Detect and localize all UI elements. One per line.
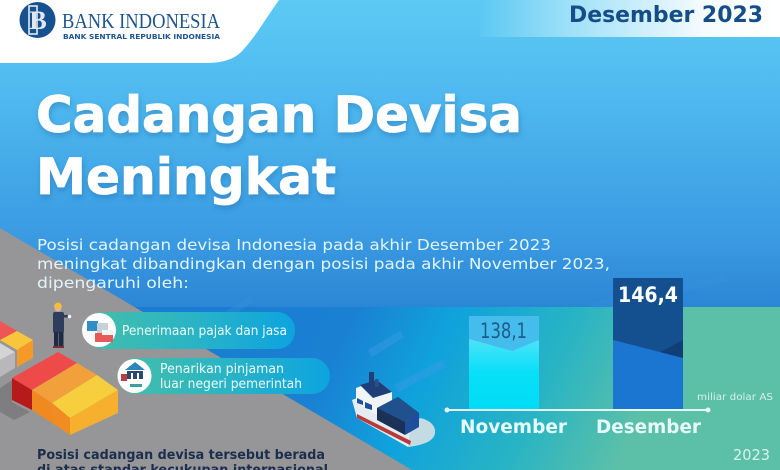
- bar: Desember: 146,4: [618, 283, 678, 307]
- logo emblem: [20, 2, 56, 38]
- containers left stack: [0, 321, 33, 377]
- decorative water streaks: [225, 276, 727, 392]
- bar: Desember: [613, 278, 683, 409]
- axis: [444, 408, 710, 412]
- intro text: Posisi cadangan devisa Indonesia pada akhir Desember 2023: [37, 236, 551, 254]
- pill: government loans: [118, 358, 330, 394]
- bar: November: 138,1: [480, 319, 527, 343]
- title: Cadangan Devisa: [36, 86, 522, 144]
- icon: bank: [118, 359, 152, 393]
- date banner: [480, 0, 780, 37]
- bar chart: [444, 278, 773, 438]
- logo tagline: BANK SENTRAL REPUBLIK INDONESIA: [63, 33, 221, 41]
- pill: tax and services: Penerimaan pajak dan jasa: [122, 324, 287, 339]
- intro text: meningkat dibandingkan dengan posisi pada akhir November 2023,: [37, 255, 610, 273]
- intro text: [37, 236, 610, 292]
- date banner: Desember 2023: [569, 3, 763, 28]
- icon: documents: [82, 313, 116, 347]
- bar: November: [469, 316, 539, 409]
- gray dock: [0, 228, 412, 470]
- title: [36, 86, 522, 206]
- pill: government loans: luar negeri pemerintah: [160, 377, 302, 392]
- pill: government loans: Penarikan pinjaman: [160, 362, 284, 377]
- closing statement: Posisi cadangan devisa tersebut berada: [37, 447, 325, 463]
- worker figure: [53, 302, 71, 348]
- pill: tax and services: [82, 312, 295, 349]
- unit label: miliar dolar AS: [697, 392, 773, 403]
- intro text: dipengaruhi oleh:: [37, 274, 189, 292]
- ship: [352, 372, 435, 447]
- bar label december: Desember: [596, 417, 702, 438]
- title: Meningkat: [36, 148, 336, 206]
- closing statement: [37, 447, 328, 470]
- header: logo tab: [0, 0, 279, 63]
- logo emblem: B: [29, 6, 47, 35]
- logo name: BANK INDONESIA: [62, 9, 221, 33]
- containers front stack: [0, 352, 118, 435]
- bar label november: November: [460, 417, 568, 438]
- teal water band: [0, 307, 780, 470]
- year label: 2023: [733, 446, 770, 464]
